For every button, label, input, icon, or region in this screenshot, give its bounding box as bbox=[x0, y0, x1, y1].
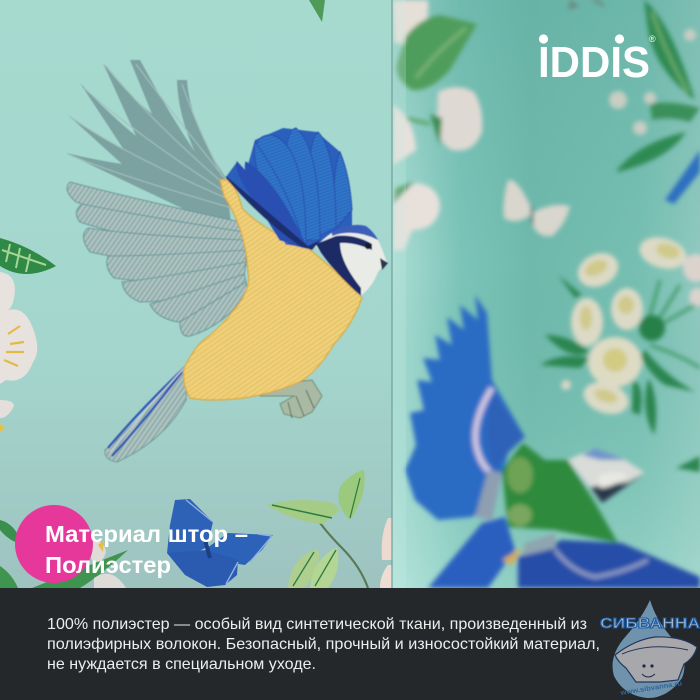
badge: pink circle bbox=[15, 505, 93, 583]
logo: Sibvanna watermark: www.sibvanna.ru bbox=[619, 680, 683, 697]
bird: feet bbox=[258, 380, 322, 418]
panel: left curtain fabric bbox=[0, 0, 392, 588]
leaf: top stem bbox=[309, 0, 325, 22]
bird: yellow body bbox=[184, 180, 362, 400]
heading: Полиэстер bbox=[45, 552, 171, 578]
bird: tail bbox=[105, 366, 187, 462]
panel: right curtain fabric bbox=[392, 0, 700, 588]
heading: Материал штор – bbox=[45, 521, 248, 547]
illustration: blossom cluster bbox=[540, 232, 700, 472]
logo: IDDIS: IDDIS bbox=[538, 38, 650, 87]
illustration: bottom-left leaves and flower bbox=[0, 520, 128, 588]
bird: blue wing bbox=[226, 128, 352, 248]
text block: description: 100% полиэстер — особый вид синтетической ткани, произведенный из bbox=[47, 616, 587, 633]
illustration: green branch with leaves bbox=[267, 470, 368, 588]
illustration: blurred blue tit bbox=[405, 295, 700, 588]
logo: Sibvanna watermark bbox=[600, 600, 700, 698]
bird: head bbox=[316, 225, 388, 296]
illustration: blurred top flowers and leaves bbox=[392, 0, 482, 250]
illustration: blue tit bird in flight bbox=[66, 60, 388, 462]
illustration: top right foliage and blue feather bbox=[568, 0, 700, 204]
bird: grey wing feathers bbox=[66, 60, 248, 336]
illustration: pale butterfly bbox=[504, 180, 570, 236]
text block: description: полиэфирных волокон. Безопасный, прочный и износостойкий материал, bbox=[47, 636, 600, 653]
logo: Sibvanna watermark: СИБВАННА bbox=[600, 615, 700, 632]
illustration: blue butterfly bbox=[167, 499, 273, 587]
logo: IDDIS: ® bbox=[649, 34, 656, 44]
curtain fold seam bbox=[391, 0, 393, 588]
illustration: left flower cluster bbox=[0, 238, 56, 432]
panel: bottom dark band bbox=[0, 588, 700, 700]
text block: description: не нуждается в специальном уходе. bbox=[47, 656, 316, 673]
illustration: pink flower at seam bbox=[380, 518, 392, 588]
